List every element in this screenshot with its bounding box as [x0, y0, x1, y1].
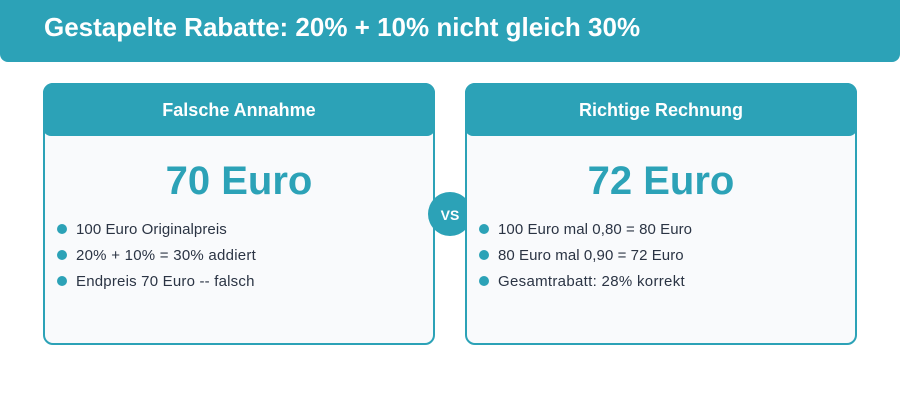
- list item: total discount: Gesamtrabatt: 28% korrekt: [498, 273, 685, 290]
- panel: wrong assumption: [43, 83, 435, 345]
- list item: added percentages: 20% + 10% = 30% addiert: [76, 247, 256, 264]
- title banner: [0, 0, 900, 62]
- panel heading: correct calculation: Richtige Rechnung: [579, 100, 743, 120]
- panel heading: wrong assumption: Falsche Annahme: [162, 100, 316, 120]
- vs badge: VS: [441, 207, 459, 223]
- big number: 70 Euro: 70 Euro: [166, 159, 312, 203]
- list item: second discount step: 80 Euro mal 0,90 = 72 Euro: [498, 247, 684, 264]
- list item: original price: 100 Euro Originalpreis: [76, 221, 227, 238]
- panel: correct calculation: [465, 83, 857, 345]
- panel heading: correct calculation: [465, 83, 857, 136]
- list item: wrong final price: Endpreis 70 Euro -- falsch: [76, 273, 255, 290]
- list item: first discount step: 100 Euro mal 0,80 = 80 Euro: [498, 221, 692, 238]
- big number: 72 Euro: 72 Euro: [588, 159, 734, 203]
- vs badge: [428, 192, 472, 236]
- title banner: Gestapelte Rabatte: 20% + 10% nicht gleich 30%: [44, 12, 640, 42]
- panel heading: wrong assumption: [43, 83, 435, 136]
